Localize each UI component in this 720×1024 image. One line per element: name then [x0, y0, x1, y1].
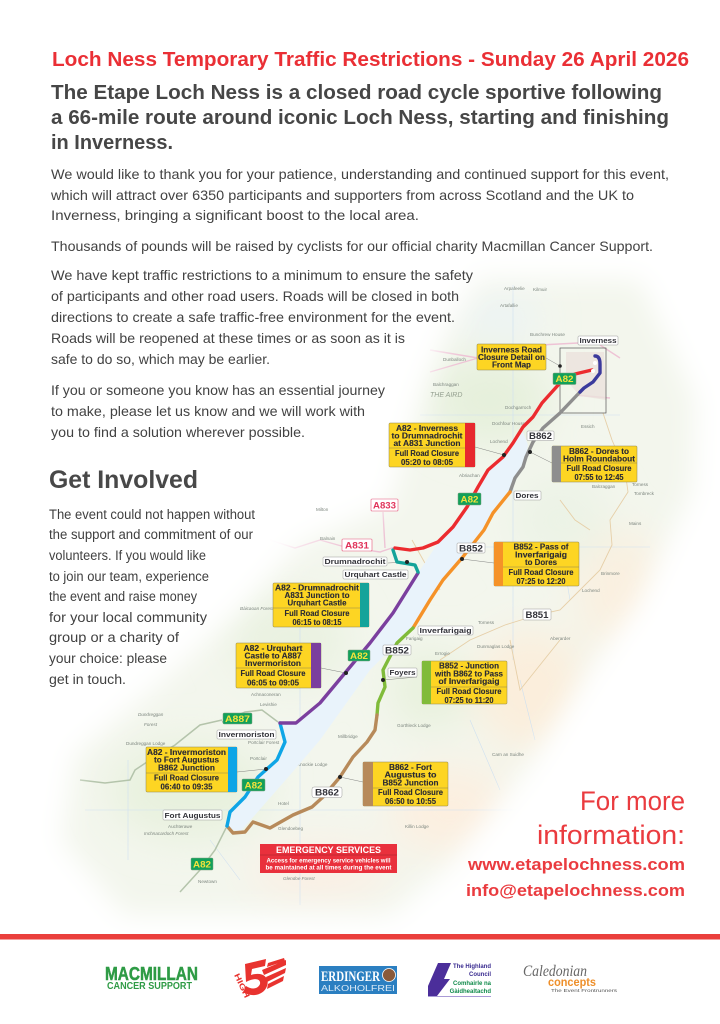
- traffic restrictions paragraph: safe to do so, which may be earlier.: [51, 351, 270, 367]
- callout: B852 Pass of Inverfarigaig to Dores: B852 - Pass of: [514, 542, 569, 552]
- callout: B852 Junction with B862 to Pass of Inverfarigaig: of Inverfarigaig: [438, 677, 500, 686]
- map place names: Mains: [629, 521, 642, 526]
- route: A82 purple: [280, 573, 418, 723]
- map place names: Dundreggan Lodge: [126, 741, 166, 746]
- sign: B862: B862: [529, 431, 552, 441]
- callout: B852 Junction with B862 to Pass of Inverfarigaig: Full Road Closure: [436, 687, 502, 696]
- more information: info@etapelochness.com: [466, 881, 685, 900]
- traffic restrictions paragraph: [51, 267, 473, 367]
- callout: A82 Invermoriston to Fort Augustus: [146, 747, 237, 792]
- logo: The Highland Council: [428, 963, 492, 997]
- map place names: Lochend: [490, 439, 508, 444]
- map place names: Whitefield: [513, 565, 534, 570]
- more information: information:: [537, 820, 685, 850]
- sign: A887: A887: [225, 713, 250, 724]
- charity paragraph: Thousands of pounds will be raised by cyclists for our official charity Macmillan Cancer Support.: [51, 238, 653, 254]
- logo: The Highland Council: Comhairle na: [453, 981, 492, 987]
- map place names: Aberarder: [550, 636, 571, 641]
- callout: A82 Drumnadrochit to Urquhart Castle: Full Road Closure: [284, 609, 350, 618]
- callout: A82 Drumnadrochit to Urquhart Castle: Urquhart Castle: [288, 598, 347, 608]
- map background: [64, 278, 695, 918]
- inset: Inverness detail frame: [560, 348, 606, 413]
- map place names: Achnaconeran: [251, 692, 281, 697]
- map place names: Balchraggan: [433, 382, 459, 387]
- subheading: in Inverness.: [51, 132, 173, 154]
- label: Fort Augustus: Fort Augustus: [164, 811, 220, 820]
- map place names: Tombreck: [634, 491, 655, 496]
- route: Inverness navy: [580, 356, 600, 392]
- map place names: Knockie Lodge: [297, 762, 328, 767]
- route: A82 red: [395, 370, 592, 550]
- label: Inverness: Inverness: [580, 336, 616, 345]
- leader lines: [237, 358, 560, 782]
- intro paragraph: [50, 166, 669, 223]
- intro paragraph: which will attract over 6350 participants and supporters from across Scotland and the UK to: [50, 187, 634, 203]
- sign: B851: [523, 609, 551, 620]
- map place names: Brinmore: [601, 571, 620, 576]
- heading: Get Involved: Get Involved: [49, 466, 198, 494]
- callout: B852 Pass of Inverfarigaig to Dores: 07:25 to 12:20: [516, 577, 566, 586]
- subheading: a 66-mile route around iconic Loch Ness, starting and finishing: [51, 107, 669, 129]
- callout: A82 Urquhart Castle to A887 Invermoriston: A82 - Urquhart: [244, 644, 303, 653]
- map place names: Dunballoch: [443, 357, 466, 362]
- callout: emergency services: [260, 844, 397, 873]
- callout: B852 Junction with B862 to Pass of Inverfarigaig: 07:25 to 11:20: [444, 696, 494, 705]
- traffic restrictions paragraph: Roads will be reopened at these times or as soon as it is: [51, 330, 405, 346]
- callout: B852 Pass of Inverfarigaig to Dores: Full Road Closure: [508, 568, 574, 577]
- callout: A82 Inverness to Drumnadrochit: at A831 Junction: [394, 439, 461, 448]
- callout: B852 Pass of Inverfarigaig to Dores: [494, 542, 579, 586]
- map place names: Essich: [581, 424, 595, 429]
- route markers: [264, 364, 562, 779]
- map place names: Dunmaglas Lodge: [477, 644, 515, 649]
- callout: A82 Urquhart Castle to A887 Invermoriston: Invermoriston: [245, 659, 301, 668]
- sign: A833: A833: [373, 500, 396, 510]
- map place names: Carn an Suidhe: [492, 752, 524, 757]
- map place names: Invermoriston: [286, 724, 314, 729]
- map place names: Dundreggan: [138, 712, 164, 717]
- callout: A82 Inverness to Drumnadrochit: [389, 423, 475, 467]
- more information: www.etapelochness.com: [467, 855, 685, 874]
- map place names: Balcraggan: [592, 484, 616, 489]
- logo: Erdinger: ALKOHOLFREI: [321, 983, 395, 993]
- subheading: [51, 82, 669, 154]
- logo: Macmillan: MACMILLAN: [105, 964, 198, 984]
- map place names: Balnain: [320, 536, 336, 541]
- get involved text: your choice: please: [49, 651, 167, 666]
- get involved text: the event and raise money: [49, 589, 197, 604]
- get involved text: volunteers. If you would like: [49, 548, 206, 563]
- more information: For more: [580, 786, 685, 816]
- sign: A831: [342, 539, 372, 551]
- map place names: Killin Lodge: [405, 824, 429, 829]
- traffic restrictions paragraph: directions to create a safe traffic-free environment for the event.: [51, 309, 455, 325]
- callout: A82 Invermoriston to Fort Augustus: 06:40 to 09:35: [160, 782, 213, 792]
- essential journey paragraph: [51, 382, 385, 440]
- callout: B862 Fort Augustus to B852 Junction: B862 - Fort: [389, 763, 432, 772]
- sign: B852 south: B852: [385, 646, 409, 656]
- sign: A82 north: A82: [556, 373, 574, 384]
- sign: A82 south: A82: [244, 780, 262, 790]
- callout: A82 Invermoriston to Fort Augustus: Full Road Closure: [154, 774, 220, 782]
- callout: emergency services: EMERGENCY SERVICES: [276, 845, 381, 856]
- callout: A82 Invermoriston to Fort Augustus: A82 - Invermoriston: [147, 748, 226, 757]
- map place names: Portclair Forest: [248, 740, 280, 745]
- map place names: [126, 286, 655, 884]
- label: Invermoriston: Invermoriston: [218, 730, 275, 739]
- sign: A82 Fort Augustus: A82: [193, 858, 211, 870]
- callout: A82 Invermoriston to Fort Augustus: to Fort Augustus: [154, 756, 220, 764]
- water: Loch Ness: [228, 432, 528, 832]
- callout: B862 Dores to Holm Roundabout: B862 - Dores to: [569, 447, 629, 456]
- logo: Erdinger: ERDINGER: [321, 969, 380, 985]
- route: B852 orange: [413, 492, 510, 628]
- get involved text: get in touch.: [49, 672, 126, 687]
- map place names: THE AIRD: [430, 392, 462, 399]
- get involved text: to join our team, experience: [49, 569, 209, 584]
- sign: A82 loch: A82: [460, 494, 478, 504]
- map place names: Gorthleck Lodge: [397, 723, 431, 728]
- traffic restrictions paragraph: of participants and other road users. Roads will be closed in both: [51, 288, 459, 304]
- map place names: Millbridge: [338, 734, 358, 739]
- map place names: Forest: [144, 722, 158, 727]
- sign: B862 south: B862: [315, 788, 339, 798]
- label: Foyers: Foyers: [390, 668, 416, 677]
- map place names: Farigaig: [406, 636, 423, 641]
- place labels: [163, 336, 618, 820]
- callout: B862 Dores to Holm Roundabout: Full Road Closure: [566, 464, 632, 473]
- traffic restrictions paragraph: We have kept traffic restrictions to a minimum to ensure the safety: [51, 267, 473, 283]
- map place names: Auchterawe: [168, 824, 193, 829]
- label: Urquhart Castle: Urquhart Castle: [344, 570, 406, 579]
- callout: B852 Junction with B862 to Pass of Inverfarigaig: with B862 to Pass: [434, 670, 504, 678]
- map place names: Bunchrew House: [530, 332, 565, 337]
- logo: Macmillan: [105, 964, 198, 992]
- route: B862 brown: [227, 715, 377, 833]
- essential journey paragraph: to make, please let us know and we will work with: [51, 403, 365, 419]
- callout: B852 Pass of Inverfarigaig to Dores: Inverfarigaig: [515, 550, 567, 560]
- callout: B862 Fort Augustus to B852 Junction: Augustus to: [384, 770, 437, 780]
- callout: A82 Drumnadrochit to Urquhart Castle: [273, 583, 369, 627]
- logo: Caledonian Concepts: concepts: [548, 975, 596, 989]
- callout: B862 Fort Augustus to B852 Junction: 06:50 to 10:55: [385, 797, 437, 806]
- map place names: Bàicaoan Forest: [240, 606, 274, 611]
- road signs: [191, 373, 576, 870]
- map place names: Dochfour House: [492, 421, 526, 426]
- callout: Inverness road closure detail: Inverness Road: [481, 346, 542, 354]
- map place names: Abriachan: [459, 473, 480, 478]
- logo: High5: [232, 958, 286, 1000]
- callout: A82 Invermoriston to Fort Augustus: B862 Junction: [158, 764, 215, 772]
- map place names: Torness: [478, 620, 495, 625]
- callout: A82 Inverness to Drumnadrochit: A82 - Inverness: [396, 424, 459, 433]
- map place names: Levishie: [260, 702, 277, 707]
- callout: B862 Dores to Holm Roundabout: Holm Roundabout: [563, 454, 635, 464]
- callout: B862 Fort Augustus to B852 Junction: Full Road Closure: [378, 788, 444, 797]
- callout: A82 Urquhart Castle to A887 Invermoriston: 06:05 to 09:05: [247, 678, 300, 688]
- callout: A82 Drumnadrochit to Urquhart Castle: 06:15 to 08:15: [292, 618, 342, 627]
- logo: Caledonian Concepts: [523, 963, 618, 994]
- label: Drumnadrochit: Drumnadrochit: [324, 557, 386, 566]
- callout: A82 Drumnadrochit to Urquhart Castle: A82 - Drumnadrochit: [275, 584, 359, 592]
- map place names: Lochend: [582, 588, 600, 593]
- grid lines and water courses: [85, 285, 650, 905]
- callout: A82 Inverness to Drumnadrochit: Full Road Closure: [395, 449, 460, 458]
- callout: B862 Fort Augustus to B852 Junction: B852 Junction: [382, 778, 439, 788]
- route: A82 light blue: [227, 723, 285, 826]
- callout: Inverness road closure detail: [477, 344, 546, 370]
- callout: B862 Dores to Holm Roundabout: 07:55 to 12:45: [574, 473, 624, 482]
- title: Loch Ness Temporary Traffic Restrictions - Sunday 26 April 2026: [52, 49, 689, 71]
- map place names: Dochgarroch: [505, 405, 532, 410]
- map place names: Torness: [632, 482, 649, 487]
- callout: A82 Urquhart Castle to A887 Invermoriston: Full Road Closure: [240, 669, 306, 678]
- intro paragraph: We would like to thank you for your patience, understanding and continued support for this event,: [51, 166, 669, 182]
- route: B862 grey: [510, 392, 580, 492]
- sign: A82 mid: A82: [350, 650, 368, 661]
- logo: The Highland Council: The Highland: [453, 964, 491, 970]
- sign: A831: A831: [345, 540, 369, 550]
- map place names: Milton: [316, 507, 329, 512]
- sign: B852: B852: [459, 544, 483, 554]
- callout: Inverness road closure detail: Front Map: [492, 360, 531, 370]
- map place names: Hotel: [278, 801, 289, 806]
- intro paragraph: Inverness, bringing a significant boost to the local area.: [51, 207, 419, 223]
- route: B852 green: [377, 628, 413, 715]
- logo: The Highland Council: Gàidhealtachd: [450, 989, 491, 995]
- callout: Inverness road closure detail: Closure Detail on: [478, 353, 545, 362]
- sign: B862 south: [312, 787, 342, 798]
- callout: A82 Drumnadrochit to Urquhart Castle: A831 Junction to: [284, 591, 350, 600]
- get involved text: for your local community: [49, 610, 207, 625]
- logo: Caledonian Concepts: Caledonian: [523, 963, 587, 980]
- callout: A82 Inverness to Drumnadrochit: to Drumnadrochit: [392, 432, 463, 440]
- route map: [146, 336, 637, 873]
- more information: [466, 786, 685, 900]
- subheading: The Etape Loch Ness is a closed road cycle sportive following: [51, 82, 662, 104]
- map place names: Kilmuir: [533, 287, 548, 292]
- logo: Caledonian Concepts: The Event Frontrunners: [551, 988, 618, 994]
- get involved text: the support and commitment of our: [49, 527, 253, 542]
- callout: B862 Fort Augustus to B852 Junction: [363, 762, 448, 806]
- essential journey paragraph: If you or someone you know has an essential journey: [51, 382, 385, 398]
- map place names: Portclair: [250, 756, 267, 761]
- callout: A82 Urquhart Castle to A887 Invermoriston: [236, 643, 321, 688]
- logo: The Highland Council: Council: [469, 972, 491, 978]
- get involved text: group or a charity of: [49, 630, 179, 645]
- map place names: Inchnacardoch Forest: [144, 831, 189, 836]
- label: Dores: Dores: [516, 491, 538, 500]
- callout: emergency services: be maintained at all times during the event: [266, 866, 392, 872]
- callout: emergency services: Access for emergency service vehicles will: [266, 858, 391, 864]
- callout: B852 Pass of Inverfarigaig to Dores: to Dores: [525, 558, 558, 567]
- map place names: Artafallie: [500, 303, 518, 308]
- map place names: Glendoebeg: [278, 826, 303, 831]
- sign: B851: B851: [526, 610, 548, 620]
- sign: A82 south: [242, 779, 265, 791]
- callout: B862 Dores to Holm Roundabout: [552, 446, 637, 482]
- map place names: Errogie: [435, 651, 450, 656]
- sign: A82 loch: [458, 493, 481, 505]
- callout: B852 Junction with B862 to Pass of Inverfarigaig: B852 - Junction: [439, 662, 499, 670]
- get involved text: The event could not happen without: [49, 507, 255, 522]
- callout: A82 Urquhart Castle to A887 Invermoriston: Castle to A887: [244, 652, 302, 660]
- route: A82 teal: [393, 550, 418, 572]
- logo: Macmillan: CANCER SUPPORT: [107, 980, 193, 992]
- logo: High5: HIGH: [232, 972, 251, 1000]
- map place names: Glendoe Forest: [283, 876, 315, 881]
- map place names: Arpafeelie: [504, 286, 525, 291]
- essential journey paragraph: you to find a solution wherever possible.: [51, 424, 305, 440]
- town: Inverness: [566, 352, 606, 400]
- callout: A82 Inverness to Drumnadrochit: 05:20 to 08:05: [401, 458, 454, 467]
- label: Inverfarigaig: Inverfarigaig: [420, 626, 472, 635]
- footer rule: [0, 934, 720, 940]
- logo: Erdinger: [319, 966, 397, 994]
- map place names: Newtown: [198, 879, 217, 884]
- get involved text: [49, 507, 255, 687]
- callout: B852 Junction with B862 to Pass of Inverfarigaig: [422, 661, 507, 705]
